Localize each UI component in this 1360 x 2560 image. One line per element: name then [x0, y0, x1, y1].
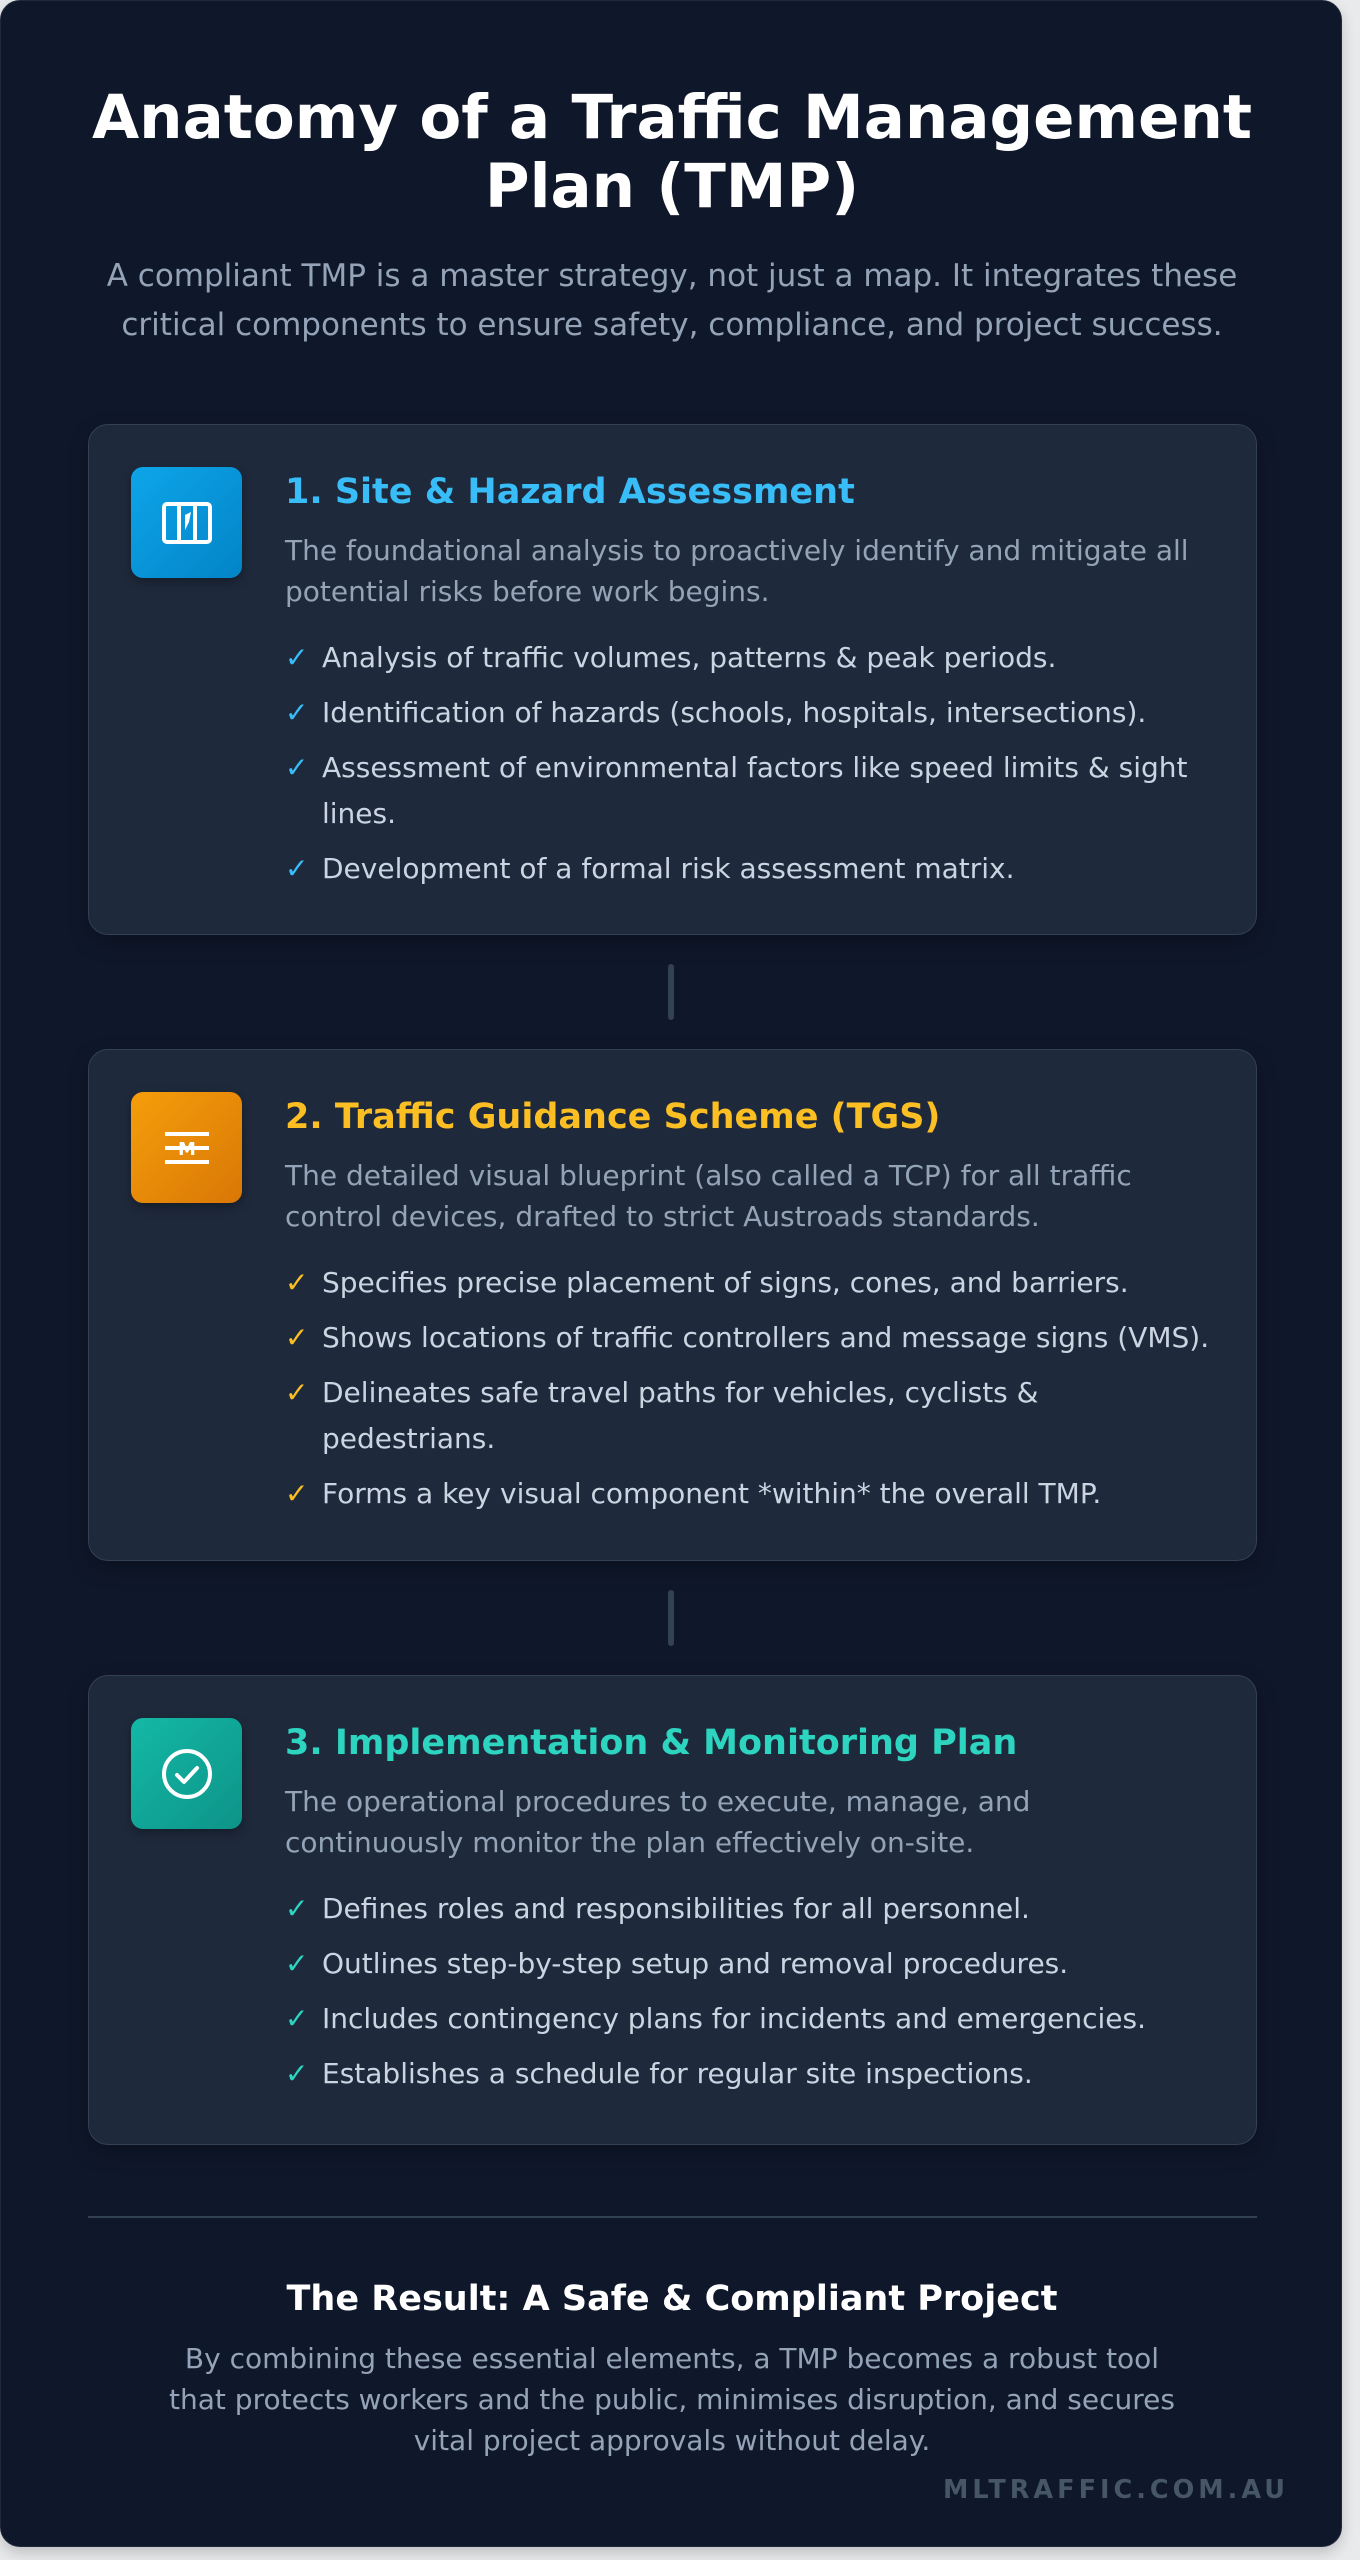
text: TGS: ✓ [285, 1266, 308, 1299]
title [92, 82, 1252, 222]
text: site & hazard: ✓ [285, 641, 308, 674]
text: TGS: 2. Traffic Guidance Scheme (TGS) [285, 1097, 940, 1137]
text: result: that protects workers and the public, minimises disruption, and secures [169, 2383, 1175, 2416]
text: implementation: ✓ [285, 1892, 308, 1925]
text: implementation: The operational procedures to execute, manage, and continuously monitor the plan effectively on-site. [285, 1785, 1030, 1859]
arrow: connector 2 [668, 1590, 674, 1646]
panel: site & hazard assessment [88, 424, 1257, 935]
text: site & hazard: ✓ [285, 852, 308, 885]
text: TGS: Shows locations of traffic controllers and message signs (VMS). [322, 1321, 1209, 1354]
text: result [169, 2342, 1175, 2457]
heading: result: The Result: A Safe & Compliant Project [287, 2279, 1057, 2319]
icon: check circle [131, 1718, 242, 1829]
text: site & hazard: ✓ [285, 751, 308, 784]
text: site & hazard: Development of a formal risk assessment matrix. [322, 852, 1014, 885]
text: result: By combining these essential elements, a TMP becomes a robust tool [185, 2342, 1159, 2375]
arrow: connector 1 [668, 964, 674, 1020]
text: TGS: ✓ [285, 1376, 308, 1409]
text: site & hazard: The foundational analysis to proactively identify and mitigate all potential risks before work begins. [285, 534, 1189, 608]
text: site & hazard: Analysis of traffic volumes, patterns & peak periods. [322, 641, 1056, 674]
text: site & hazard: ✓ [285, 696, 308, 729]
text: TGS [284, 1097, 1209, 1510]
icon: signs: M [178, 1138, 195, 1160]
title: Plan (TMP) [485, 151, 859, 222]
watermark: MLTRAFFIC.COM.AU [943, 2475, 1289, 2505]
text: site & hazard [284, 472, 1189, 885]
panel: traffic guidance scheme [88, 1049, 1257, 1561]
text: site & hazard: 1. Site & Hazard Assessment [285, 472, 855, 512]
text: TGS: ✓ [285, 1321, 308, 1354]
panel: implementation & monitoring [88, 1675, 1257, 2145]
title: Anatomy of a Traffic Management [92, 82, 1252, 153]
text: implementation: ✓ [285, 2002, 308, 2035]
text: site & hazard: Assessment of environmental factors like speed limits & sight lines. [322, 751, 1188, 830]
text: TGS: Specifies precise placement of signs, cones, and barriers. [322, 1266, 1129, 1299]
text: TGS: Delineates safe travel paths for vehicles, cyclists & pedestrians. [322, 1376, 1038, 1455]
text: implementation: 3. Implementation & Monitoring Plan [285, 1723, 1017, 1763]
text: implementation: Outlines step-by-step setup and removal procedures. [322, 1947, 1068, 1980]
text: implementation: Defines roles and responsibilities for all personnel. [322, 1892, 1030, 1925]
text: TGS: Forms a key visual component *within* the overall TMP. [322, 1477, 1101, 1510]
text: implementation [284, 1723, 1146, 2090]
icon: signs [131, 1092, 242, 1203]
text: site & hazard: Identification of hazards (schools, hospitals, intersections). [322, 696, 1146, 729]
text: implementation: ✓ [285, 2057, 308, 2090]
text: implementation: Includes contingency plans for incidents and emergencies. [322, 2002, 1146, 2035]
text: implementation: Establishes a schedule for regular site inspections. [322, 2057, 1033, 2090]
text: result: vital project approvals without delay. [414, 2424, 930, 2457]
icon: map [131, 467, 242, 578]
text: TGS: ✓ [285, 1477, 308, 1510]
text: implementation: ✓ [285, 1947, 308, 1980]
text: TGS: The detailed visual blueprint (also called a TCP) for all traffic control devices, drafted to strict Austroads standards. [285, 1159, 1132, 1233]
subtitle: A compliant TMP is a master strategy, not just a map. It integrates these critical components to ensure safety, compliance, and project success. [107, 258, 1237, 343]
